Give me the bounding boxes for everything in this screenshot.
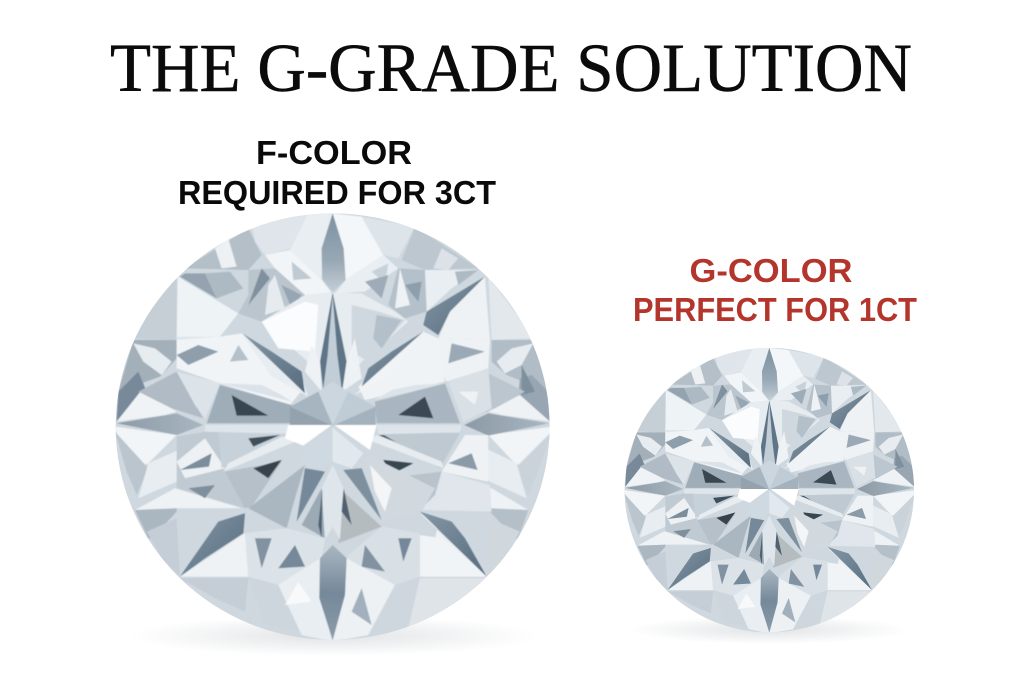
shadow: large diamond	[128, 616, 538, 656]
shadow: small diamond	[629, 616, 909, 644]
large diamond: F-color 3ct	[105, 205, 572, 652]
right label: G-color	[633, 252, 917, 328]
right label: G-color: G-COLOR	[690, 252, 853, 289]
infographic canvas	[110, 44, 917, 650]
right label: G-color: PERFECT FOR 1CT	[633, 291, 917, 328]
left label: F-color	[178, 134, 496, 211]
small diamond: G-color 1ct	[618, 342, 929, 640]
left label: F-color: F-COLOR	[256, 134, 412, 171]
title: THE G-GRADE SOLUTION	[110, 30, 912, 106]
left label: F-color: REQUIRED FOR 3CT	[178, 174, 496, 211]
